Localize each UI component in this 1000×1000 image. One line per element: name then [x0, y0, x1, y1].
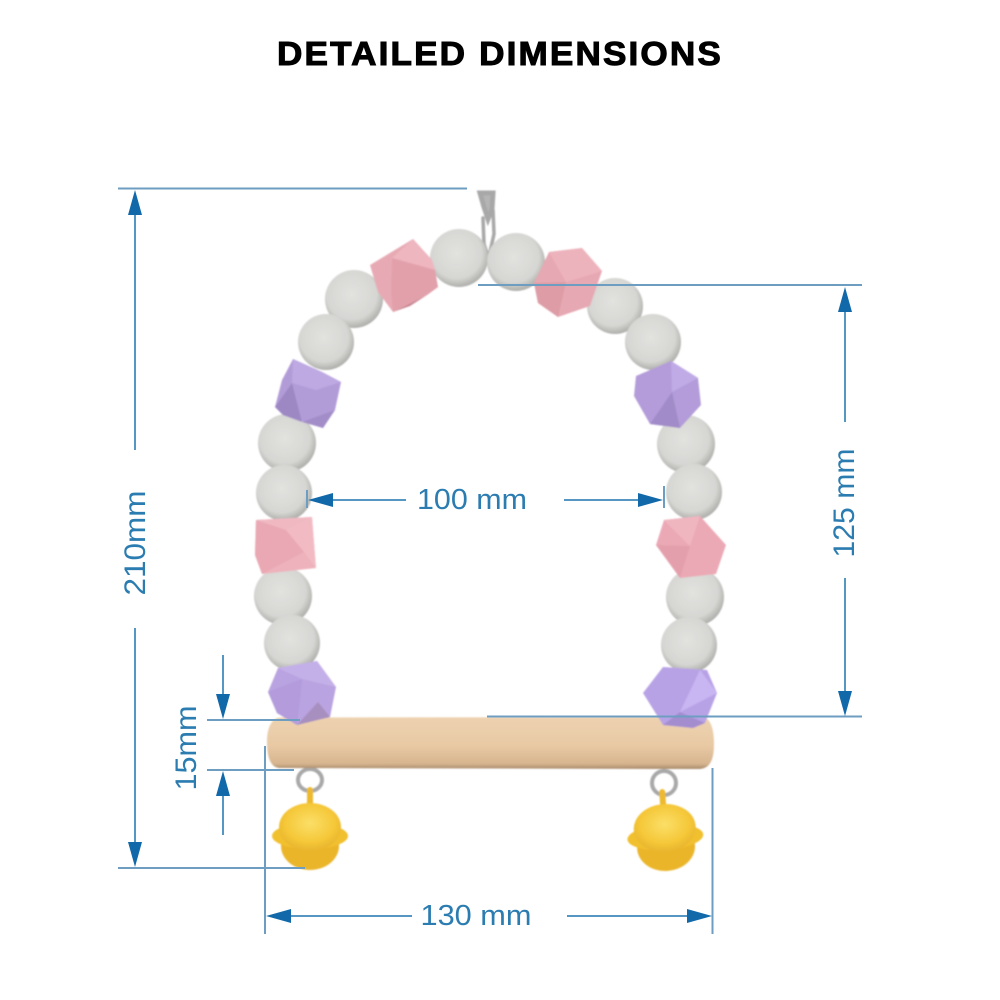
- dimension: 15mm: 15mm: [170, 706, 203, 790]
- icon: hanging clip: [480, 193, 494, 256]
- dimension: 15mm: [170, 655, 230, 835]
- white beads: [254, 229, 724, 673]
- title: DETAILED DIMENSIONS: [277, 35, 723, 72]
- dimension: 130 mm: [266, 900, 712, 932]
- purple bead upper right: [634, 361, 701, 428]
- purple bead lower left: [268, 661, 336, 725]
- icon: left bell: [272, 790, 348, 870]
- dimension: 100 mm: 100 mm: [417, 484, 527, 516]
- dimension: 130 mm: 130 mm: [420, 900, 532, 932]
- swing product illustration: [254, 193, 726, 874]
- right eye hook: [652, 771, 676, 795]
- dimension: 210mm: [119, 190, 152, 867]
- dimension: 125 mm: 125 mm: [828, 448, 861, 558]
- pink bead top right: [534, 248, 602, 317]
- wooden perch: [267, 717, 714, 769]
- purple bead upper left: [275, 359, 341, 428]
- left eye hook: [298, 769, 322, 791]
- purple bead lower right: [643, 667, 717, 728]
- extension lines: [118, 188, 862, 934]
- pink bead middle right: [656, 516, 726, 578]
- dimension: 100 mm: [308, 484, 663, 516]
- pink bead top left: [370, 239, 438, 312]
- pink bead middle left: [255, 517, 316, 574]
- dimension: 125 mm: [828, 287, 861, 716]
- dimension: 210mm: 210mm: [119, 490, 152, 596]
- icon: right bell: [624, 789, 706, 874]
